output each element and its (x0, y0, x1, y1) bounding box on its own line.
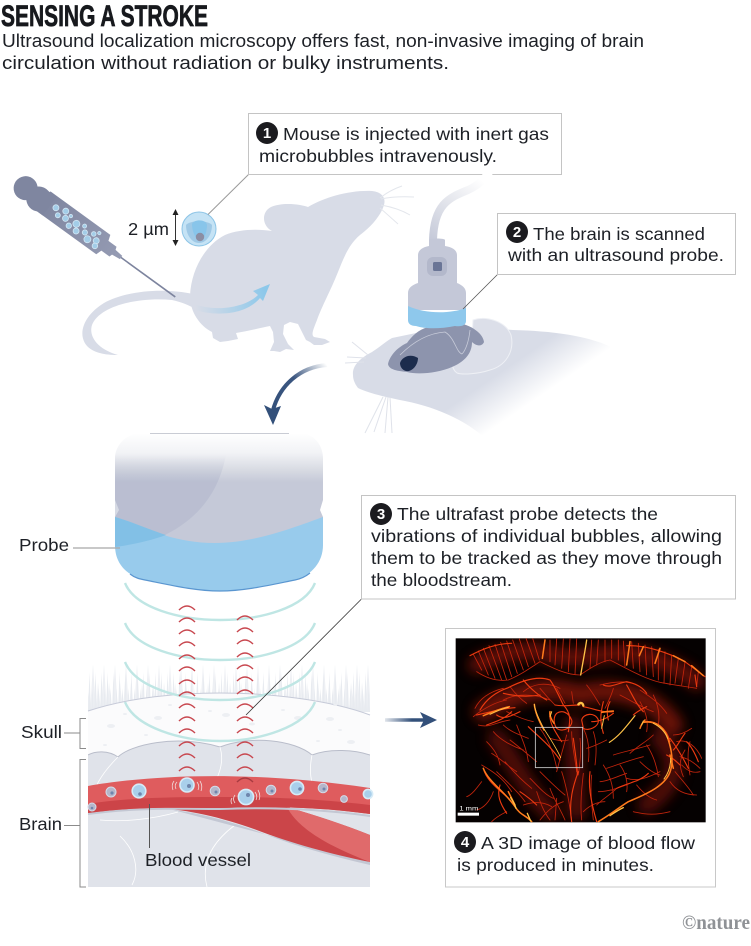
mouse head (353, 326, 650, 455)
callout 2 (498, 214, 736, 274)
callout 1 text (259, 124, 549, 166)
brain bracket (64, 760, 86, 887)
skull (88, 693, 370, 760)
microbubbles in vessel (88, 778, 373, 811)
small ultrasound probe (408, 238, 466, 328)
brain label: Brain (19, 814, 62, 834)
scale bar: 1 mm (459, 805, 478, 812)
bubble size label: 2 µm (128, 219, 169, 239)
callout 3 text: them to be tracked as they move through (371, 548, 722, 568)
number 3: 3 (377, 506, 385, 523)
subtitle text line 2: circulation without radiation or bulky instruments. (2, 53, 449, 73)
probe leader line (73, 547, 120, 549)
number 4: 4 (461, 834, 470, 851)
branch vessel (158, 806, 370, 865)
blood-flow image (456, 638, 706, 822)
mouse brain (388, 319, 512, 374)
arrow: to image (385, 712, 437, 728)
blood vessel label: Blood vessel (145, 850, 251, 870)
skull label: Skull (21, 722, 62, 742)
mouse head whiskers (345, 342, 392, 433)
callout 3 text: vibrations of individual bubbles, allowing (371, 526, 722, 546)
callout 2 leader (463, 274, 498, 309)
title: SENSING A STROKE (1, 0, 208, 33)
callout 3 text (371, 504, 722, 590)
large probe (115, 434, 323, 591)
callout 2 text (507, 224, 724, 265)
callout 3 (362, 496, 736, 599)
caption text (457, 833, 695, 875)
red sound pulses (179, 606, 253, 782)
region of interest box (535, 727, 583, 768)
number 1: 1 (263, 125, 271, 142)
subtitle text: Ultrasound localization microscopy offers fast, non-invasive imaging of brain (2, 31, 644, 51)
arrow: curved, probe to detail (264, 365, 327, 425)
icon: microbubble (182, 212, 216, 246)
arrow: bubbles entering the bloodstream (194, 284, 270, 314)
caption text: is produced in minutes. (457, 855, 654, 875)
number 3 (370, 503, 392, 525)
brain tissue (88, 740, 370, 887)
number 1 (256, 122, 278, 144)
mouse: whiskers (380, 186, 414, 224)
panel: 3D image result (446, 628, 716, 887)
callout 1 text: Mouse is injected with inert gas (283, 124, 549, 144)
number 4 (454, 831, 476, 853)
callout 2 text: with an ultrasound probe. (507, 245, 724, 265)
caption text: A 3D image of blood flow (481, 833, 695, 853)
main vessel (88, 776, 370, 817)
skull hair (88, 660, 370, 712)
scale bar (458, 805, 479, 816)
icon: syringe (8, 171, 182, 308)
callout 1 (248, 114, 562, 174)
arrow: bubble size (172, 209, 178, 246)
callout 2 text: The brain is scanned (533, 224, 705, 244)
mouse: tail (82, 291, 194, 355)
probe label: Probe (19, 535, 69, 555)
callout 3 text: the bloodstream. (371, 570, 512, 590)
number 2: 2 (513, 224, 521, 241)
callout 1 leader (208, 174, 248, 214)
mouse: body (190, 191, 384, 352)
callout 3 leader (246, 599, 362, 715)
ultrasound waves (125, 583, 315, 741)
number 2 (506, 221, 528, 243)
blood vessel leader line (148, 804, 150, 848)
callout 1 text: microbubbles intravenously. (259, 146, 497, 166)
callout 3 text: The ultrafast probe detects the (397, 504, 658, 524)
ultrasound probe cable (433, 165, 493, 240)
skull bracket (64, 718, 86, 748)
blood vessels (88, 776, 370, 865)
